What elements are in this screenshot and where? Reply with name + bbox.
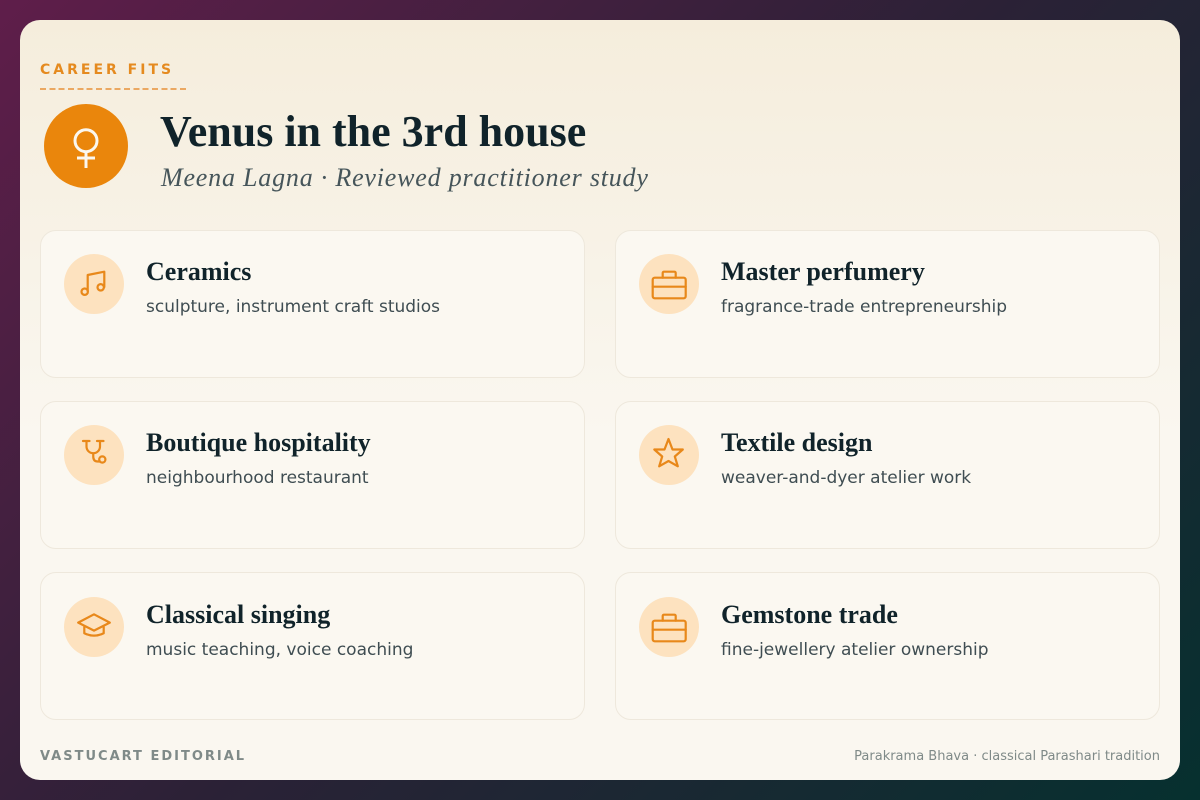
description: fine-jewellery atelier ownership xyxy=(721,640,988,660)
icon: graduation cap xyxy=(64,597,124,657)
icon: venus symbol xyxy=(44,104,128,188)
panel: classical singing card xyxy=(40,572,585,720)
heading: Master perfumery xyxy=(721,257,925,286)
icon: briefcase xyxy=(639,597,699,657)
heading: Classical singing xyxy=(146,600,330,629)
icon: star xyxy=(639,425,699,485)
title: Venus in the 3rd house xyxy=(160,107,586,156)
eyebrow dashed rule xyxy=(40,88,188,90)
panel: gemstone trade card xyxy=(615,572,1160,720)
heading: Boutique hospitality xyxy=(146,428,371,457)
heading: Ceramics xyxy=(146,257,251,286)
panel: ceramics card xyxy=(40,230,585,378)
heading: Textile design xyxy=(721,428,872,457)
description: fragrance-trade entrepreneurship xyxy=(721,297,1007,317)
subtitle: Meena Lagna · Reviewed practitioner study xyxy=(161,163,649,192)
eyebrow: career fits: CAREER FITS xyxy=(40,62,174,78)
icon: music note xyxy=(64,254,124,314)
icon: stethoscope xyxy=(64,425,124,485)
description: neighbourhood restaurant xyxy=(146,468,369,488)
description: sculpture, instrument craft studios xyxy=(146,297,440,317)
description: weaver-and-dyer atelier work xyxy=(721,468,971,488)
heading: Gemstone trade xyxy=(721,600,898,629)
panel: boutique hospitality card xyxy=(40,401,585,549)
panel: master perfumery card xyxy=(615,230,1160,378)
icon: briefcase xyxy=(639,254,699,314)
description: music teaching, voice coaching xyxy=(146,640,413,660)
footer: source: Parakrama Bhava · classical Parashari tradition xyxy=(854,749,1160,764)
footer: brand: VASTUCART EDITORIAL xyxy=(40,749,246,764)
panel: textile design card xyxy=(615,401,1160,549)
